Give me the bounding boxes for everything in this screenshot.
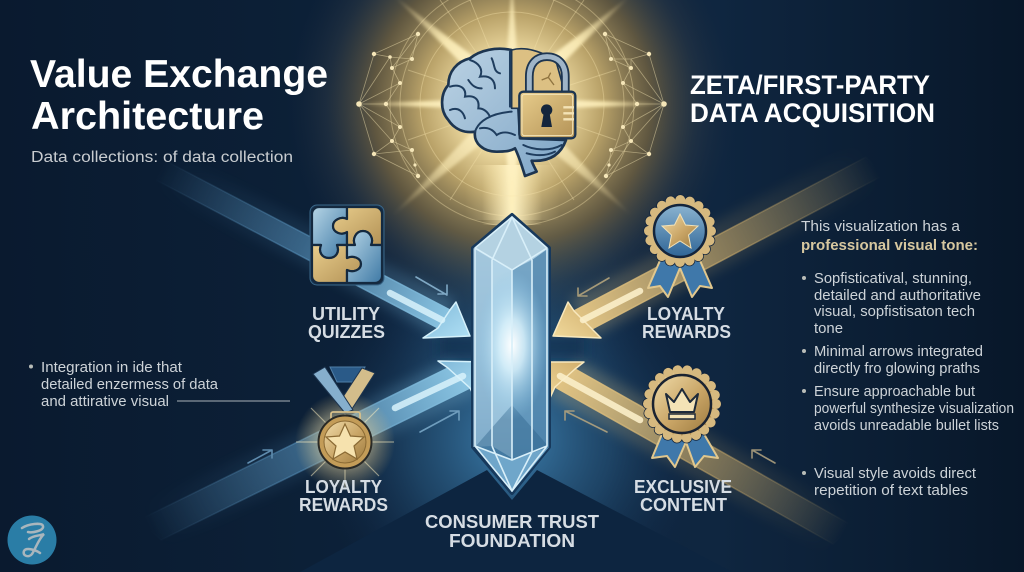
arrow: gold beam lower right	[537, 360, 860, 552]
icon: brain with padlock	[442, 49, 575, 176]
subtitle: Data collections: of data collection	[31, 149, 293, 166]
callout: integration note: detailed enzermess of data	[41, 377, 219, 393]
title	[30, 53, 328, 138]
text block: professional visual tone: professional visual tone:	[801, 238, 978, 254]
label: utility quizzes: UTILITY	[312, 304, 380, 324]
arrow: gold beam upper right	[553, 145, 892, 338]
label: exclusive content: CONTENT	[640, 495, 727, 515]
arrow: blue beam upper left	[150, 150, 470, 338]
icon: crystal prism	[473, 215, 549, 493]
text block: professional visual tone: avoids unreadable bullet lists	[814, 418, 999, 434]
label: loyalty rewards right: REWARDS	[642, 322, 731, 342]
heading: data acquisition	[690, 70, 935, 128]
label: loyalty rewards left	[299, 477, 388, 515]
text block: professional visual tone: Ensure approachable but	[814, 384, 975, 400]
callout: integration note: and attirative visual	[41, 394, 169, 410]
icon: puzzle	[310, 205, 384, 285]
text block: professional visual tone: Minimal arrows integrated	[814, 344, 983, 360]
label: exclusive content: EXCLUSIVE	[634, 477, 732, 497]
text block: professional visual tone: powerful synthesize visualization	[814, 401, 1014, 417]
icon: medal	[295, 367, 395, 492]
text block: professional visual tone: repetition of text tables	[814, 483, 968, 499]
text block: professional visual tone: This visualization has a	[801, 219, 961, 235]
label: utility quizzes	[308, 304, 385, 342]
icon: exclusive content badge	[648, 370, 718, 467]
label: consumer trust foundation: CONSUMER TRUST	[425, 512, 599, 532]
label: consumer trust foundation	[425, 512, 599, 551]
text block: professional visual tone: tone	[814, 321, 843, 337]
text block: professional visual tone: Visual style avoids direct	[814, 466, 976, 482]
label: loyalty rewards left: REWARDS	[299, 495, 388, 515]
text block: professional visual tone: directly fro glowing praths	[814, 361, 980, 377]
label: consumer trust foundation: FOUNDATION	[449, 531, 575, 551]
icon: padlock	[519, 57, 575, 138]
label: loyalty rewards right	[642, 304, 731, 342]
label: exclusive content	[634, 477, 732, 515]
arrow: blue beam lower left	[130, 360, 488, 552]
label: loyalty rewards right: LOYALTY	[647, 304, 725, 324]
icon: loyalty ribbon badge	[648, 200, 712, 297]
callout: integration note: Integration in ide that	[41, 360, 182, 376]
golden radiance behind brain	[285, 0, 740, 330]
icon: brain	[442, 49, 566, 176]
text block: professional visual tone: Sopfisticatival, stunning,	[814, 271, 972, 287]
text block: professional visual tone: visual, sopfistisaton tech	[814, 304, 975, 320]
label: utility quizzes: QUIZZES	[308, 322, 385, 342]
title: Value Exchange	[30, 53, 328, 96]
network: right constellation	[603, 32, 667, 178]
heading: data acquisition: ZETA/FIRST-PARTY	[690, 70, 930, 100]
label: loyalty rewards left: LOYALTY	[305, 477, 382, 497]
title: Architecture	[31, 95, 264, 138]
text block: professional visual tone: detailed and authoritative	[814, 288, 981, 304]
heading: data acquisition: DATA ACQUISITION	[690, 98, 935, 128]
logo badge	[8, 516, 56, 564]
text block: professional visual tone	[801, 219, 1014, 499]
small direction arrows	[248, 277, 775, 463]
network: left constellation	[356, 32, 420, 178]
callout: integration note	[29, 360, 290, 410]
